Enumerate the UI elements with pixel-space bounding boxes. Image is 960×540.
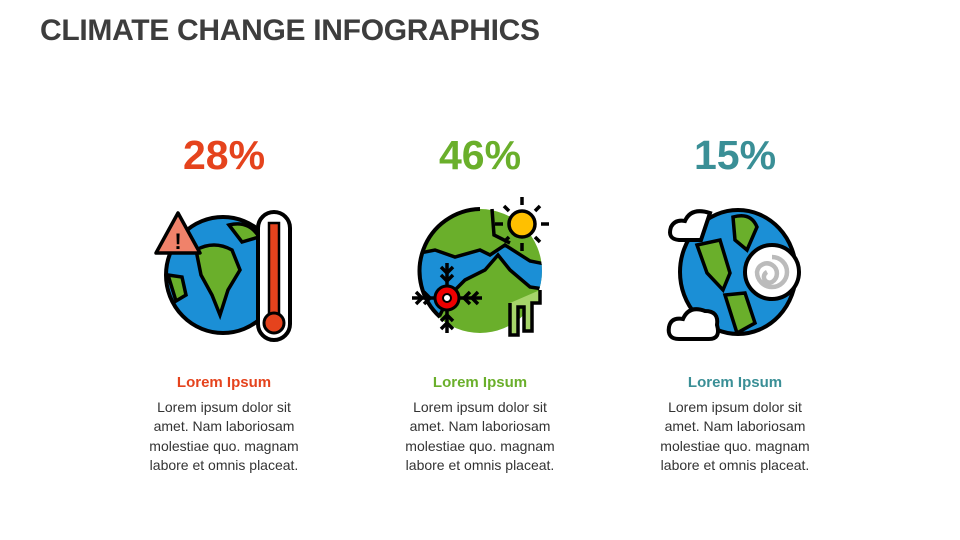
heading: Lorem Ipsum (177, 374, 271, 391)
body text (405, 399, 555, 473)
percentage 28%: 28% (183, 132, 265, 178)
body text: amet. Nam laboriosam (154, 418, 294, 434)
body text (149, 399, 299, 473)
heading: Lorem Ipsum (688, 374, 782, 391)
heading: Lorem Ipsum (433, 374, 527, 391)
body text: labore et omnis placeat. (661, 457, 809, 473)
percentage 46%: 46% (439, 132, 521, 178)
body text: labore et omnis placeat. (150, 457, 298, 473)
icon: globe with thermometer and warning (154, 210, 292, 342)
column 1 (149, 132, 299, 473)
body text: Lorem ipsum dolor sit (413, 399, 547, 415)
body text: labore et omnis placeat. (406, 457, 554, 473)
column 2 (405, 132, 555, 473)
icon: globe with clouds and cyclone (666, 208, 801, 341)
body text: molestiae quo. magnam (660, 438, 810, 454)
body text: molestiae quo. magnam (405, 438, 555, 454)
body text: amet. Nam laboriosam (410, 418, 550, 434)
icon: globe with thermometer and warning: ! (174, 229, 182, 254)
body text: Lorem ipsum dolor sit (668, 399, 802, 415)
title: CLIMATE CHANGE INFOGRAPHICS (40, 14, 540, 47)
column 3 (660, 132, 810, 473)
body text: molestiae quo. magnam (149, 438, 299, 454)
body text (660, 399, 810, 473)
icon: globe with sun and snowflake (412, 197, 549, 337)
body text: amet. Nam laboriosam (665, 418, 805, 434)
percentage 15%: 15% (694, 132, 776, 178)
body text: Lorem ipsum dolor sit (157, 399, 291, 415)
